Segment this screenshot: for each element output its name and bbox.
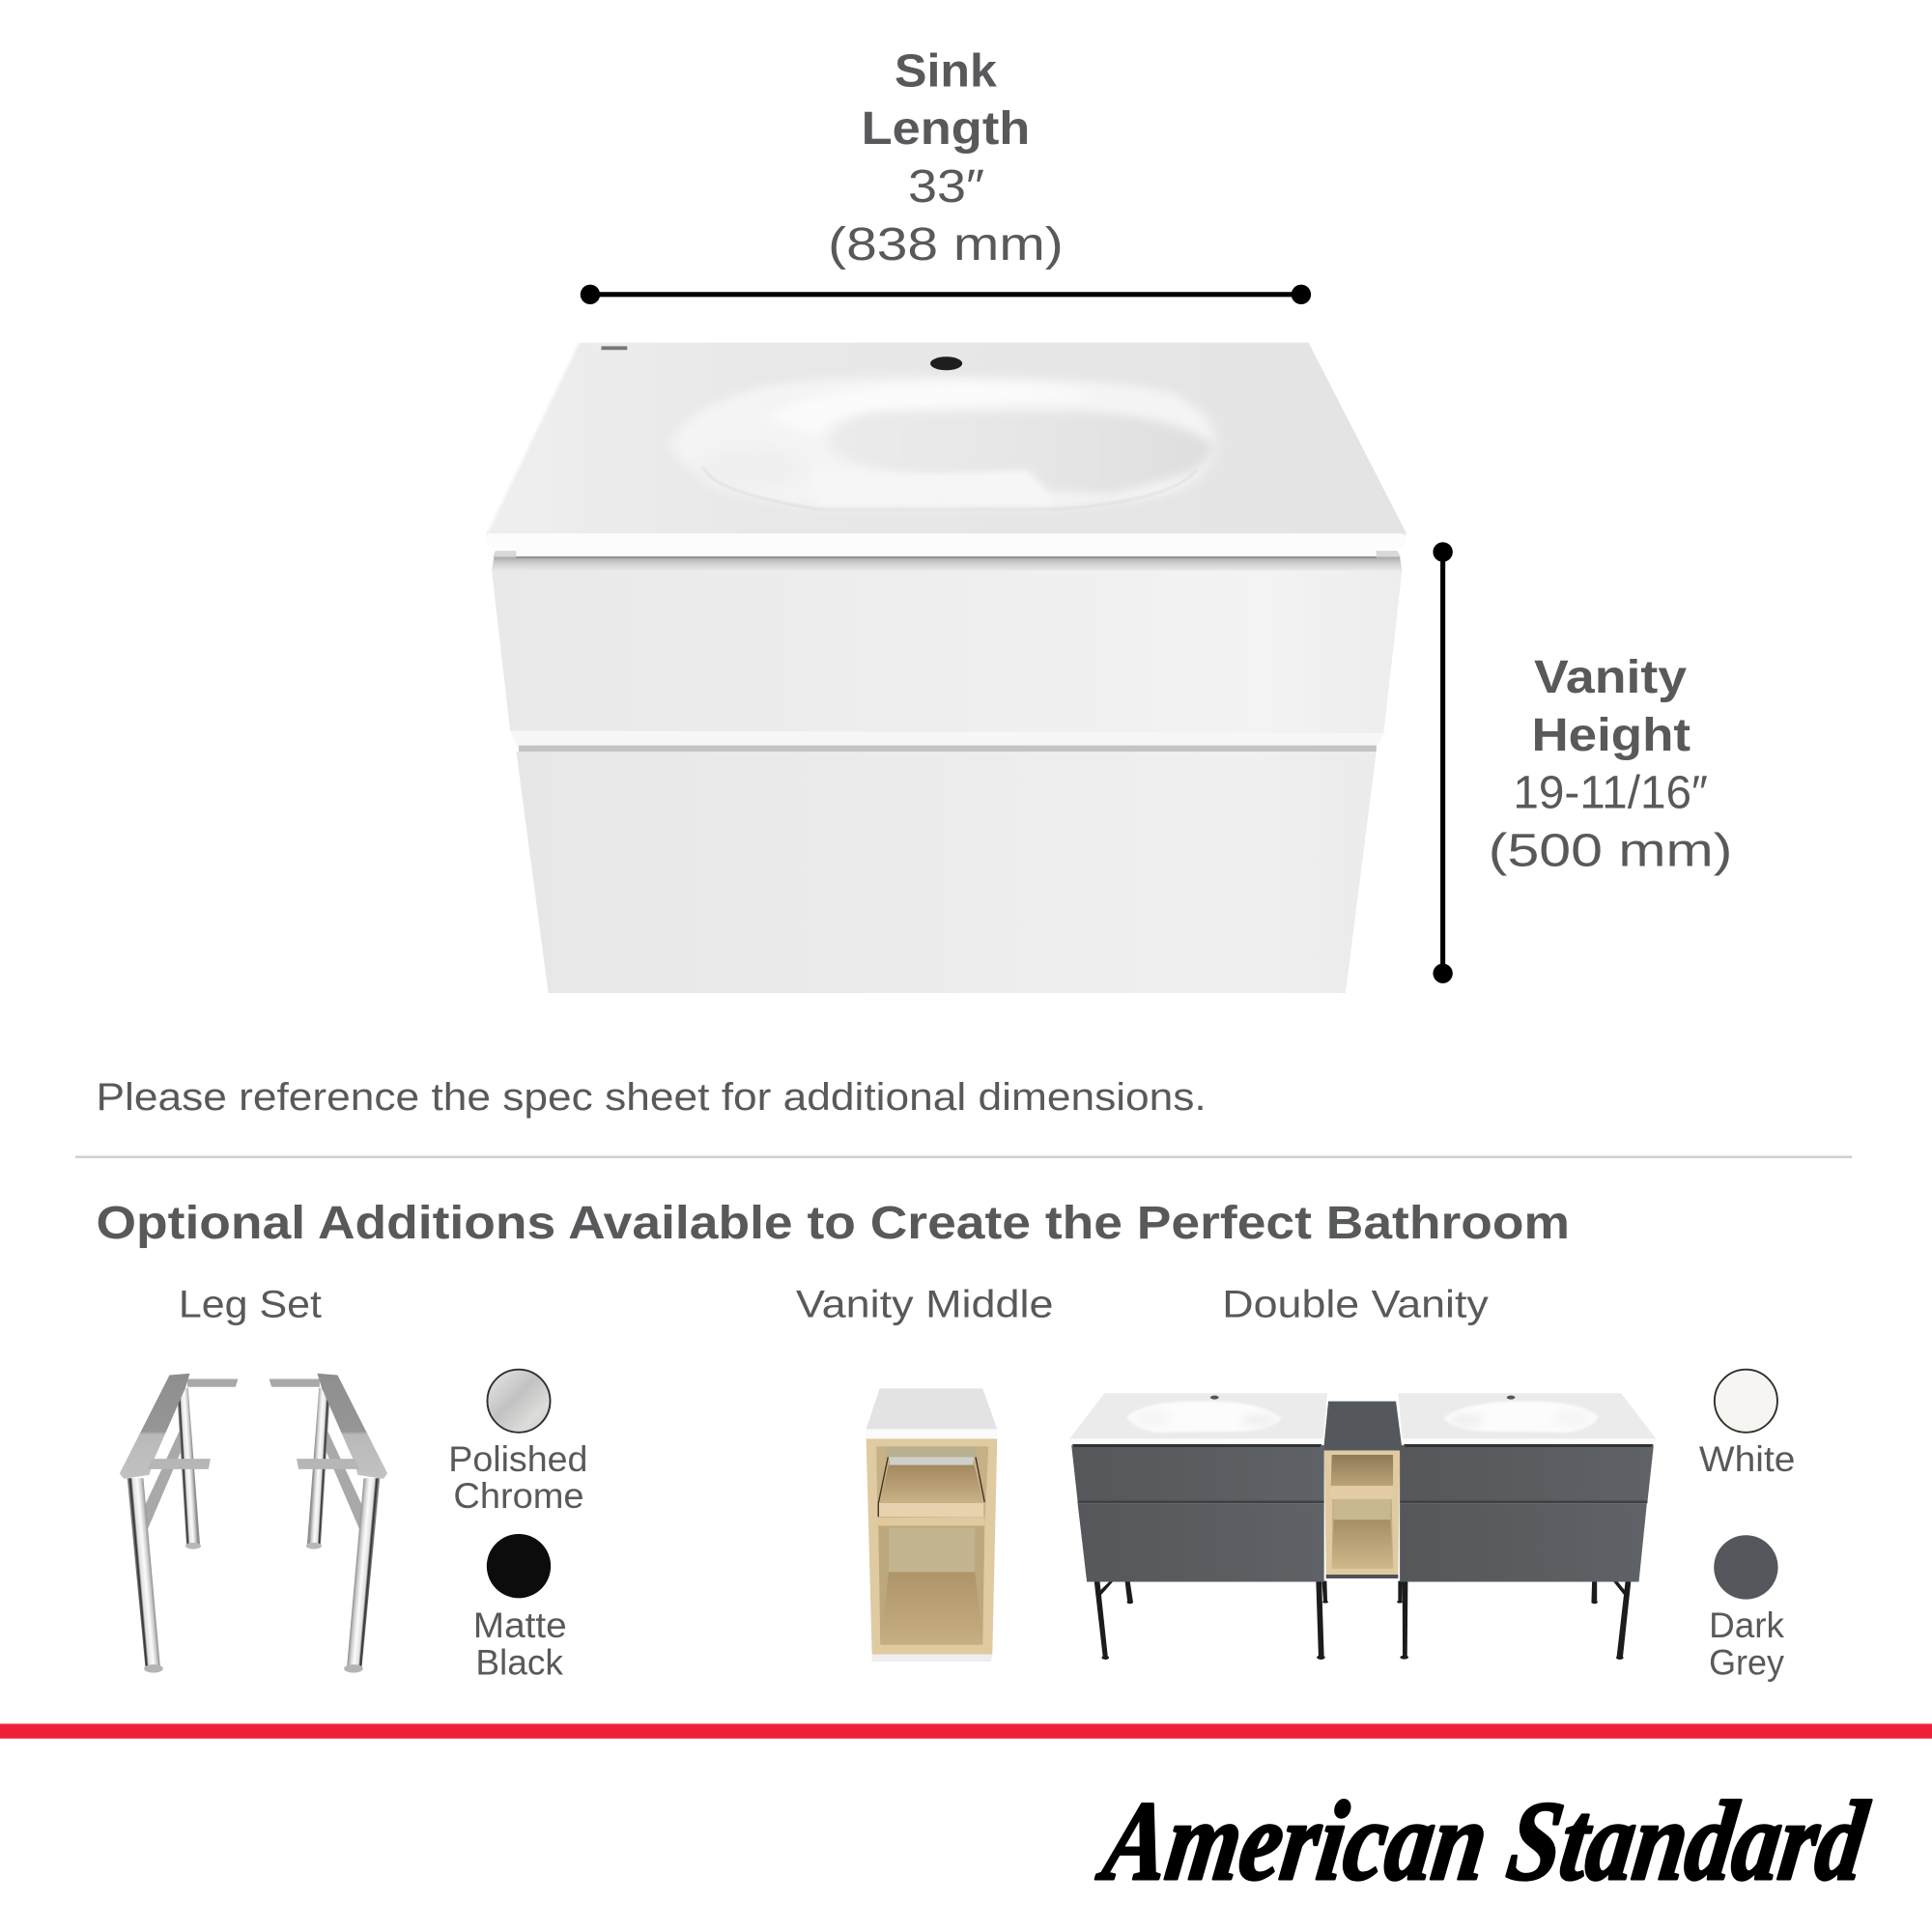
faucet hole [930,356,962,370]
cabinet recess between drawers [510,730,1385,752]
sink basin [670,377,1215,509]
right sink [1398,1393,1657,1447]
cabinet lower drawer [516,752,1377,993]
heading: vanity height dimension: Vanity [1534,651,1687,703]
image: chrome leg set [120,1374,387,1673]
note: spec sheet reference: Please reference the spec sheet for additional dimensions. [96,1076,1207,1119]
swatch: dark grey: Grey [1709,1642,1784,1682]
left sink [1069,1393,1327,1447]
heading: sink length dimension: (838 mm) [828,218,1064,270]
label: leg set: Leg Set [179,1284,322,1326]
swatch: dark grey [1709,1535,1784,1682]
image: vanity middle [867,1388,997,1662]
section heading: optional additions: Optional Additions Available to Create the Perfect Bathroom [96,1197,1570,1249]
left leg frame [120,1374,238,1673]
heading: sink length dimension [828,44,1064,270]
swatch: matte black [473,1534,567,1682]
right leg frame [270,1374,387,1673]
swatch: white [1699,1370,1795,1479]
swatch: dark grey: Dark [1709,1605,1784,1645]
image: double vanity [1069,1393,1657,1660]
sink front edge [485,533,1406,549]
swatch: matte black: Matte [473,1605,567,1645]
arrow: vanity height dimension line [1433,542,1453,983]
small sink logo mark [601,346,627,350]
basin bright upper band [766,384,1099,435]
cabinet upper drawer [492,569,1403,733]
basin lower lip [703,467,1197,509]
right cabinet [1400,1445,1654,1582]
heading: sink length dimension: Sink [895,44,997,97]
sink top surface [486,343,1406,538]
black legs [1094,1582,1631,1660]
label: double vanity: Double Vanity [1222,1284,1489,1326]
heading: vanity height dimension: 19-11/16″ [1513,767,1708,819]
basin outer rim [670,377,1215,509]
swatch: polished chrome: Chrome [453,1476,584,1516]
sink left edge highlight [488,343,579,532]
swatch: matte black: Black [475,1642,563,1682]
swatch: polished chrome [448,1370,587,1516]
basin left pocket [698,447,803,490]
heading: vanity height dimension: Height [1531,709,1690,761]
arrow: sink length dimension line [581,285,1311,304]
swatch: white: White [1699,1439,1795,1479]
heading: vanity height dimension: (500 mm) [1489,825,1732,877]
center console and wood unit [1317,1402,1408,1660]
heading: sink length dimension: 33″ [908,160,984,213]
heading: sink length dimension: Length [862,102,1030,155]
label: vanity middle: Vanity Middle [796,1284,1054,1326]
cabinets [1071,1445,1654,1582]
heading: vanity height dimension [1489,651,1732,877]
main product image: white vanity with sink [485,343,1406,993]
recess under sink [492,549,1403,571]
left cabinet [1071,1445,1324,1582]
basin bowl [829,412,1215,495]
swatch: polished chrome: Polished [448,1439,587,1479]
red divider bar [0,1723,1932,1739]
